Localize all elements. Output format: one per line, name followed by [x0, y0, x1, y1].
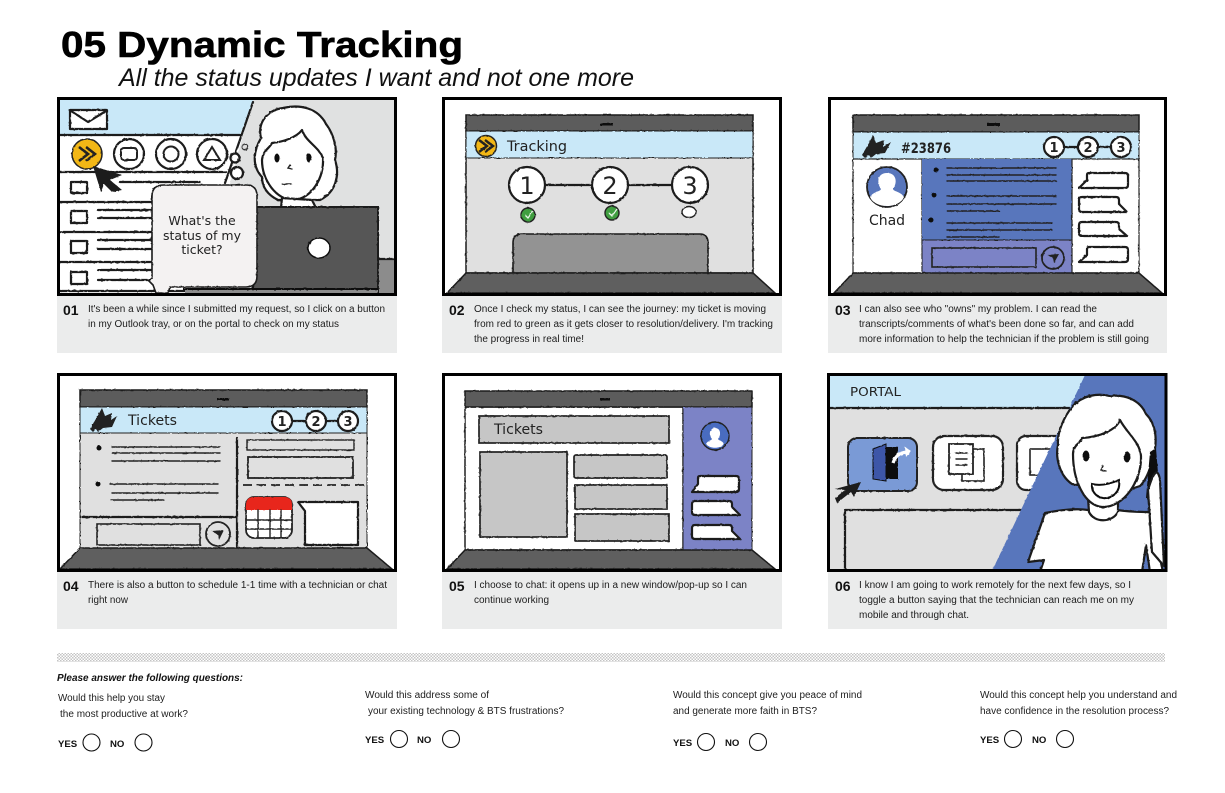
- laptop base: [447, 273, 775, 293]
- caption 01: It's been a while since I submitted my request, so I click on a button: [88, 304, 385, 315]
- chat bubbles: [1079, 173, 1128, 262]
- speech bubble: [149, 185, 257, 293]
- caption 06: I know I am going to work remotely for the next few days, so I: [859, 580, 1131, 591]
- caption background 03: [828, 296, 1167, 353]
- thought bubbles: [230, 144, 248, 179]
- list rows: [71, 182, 200, 284]
- panel 01: checking status from the Outlook tray: [57, 98, 400, 353]
- content area: [845, 510, 1030, 570]
- icon: logo mark: [862, 135, 891, 158]
- panel frame 06: [828, 374, 1166, 570]
- caption 05: I choose to chat: it opens up in a new window/pop-up so I can: [474, 580, 747, 591]
- chat bubbles: [692, 476, 740, 539]
- question 2: YES: [365, 735, 385, 746]
- question 3: NO: [725, 738, 740, 749]
- question 3: Would this concept give you peace of mind: [673, 690, 862, 701]
- panel 05: chat pop-up: [442, 374, 782, 629]
- panel frame 04: [58, 374, 396, 570]
- speech bubble text: ticket?: [181, 242, 223, 257]
- portal heading: PORTAL: [850, 384, 901, 399]
- transcript lines: [96, 446, 220, 500]
- icon: yellow tracking button: [72, 139, 102, 169]
- icon: calendar: [246, 497, 292, 538]
- icon: avatar Chad: [867, 167, 907, 207]
- caption 03: more information to help the technician if the problem is still going: [859, 334, 1149, 345]
- laptop base: [60, 548, 392, 569]
- caption 02: from red to green as it gets closer to resolution/delivery. I'm tracking: [474, 319, 773, 330]
- question 3: YES: [673, 738, 693, 749]
- question 4: [980, 690, 1177, 748]
- step number 02: 02: [449, 302, 465, 318]
- caption background 06: [828, 572, 1167, 629]
- step digits: 1: [1049, 141, 1059, 156]
- caption 02: Once I check my status, I can see the journey: my ticket is moving: [474, 304, 766, 315]
- blue diagonal background: [992, 375, 1168, 571]
- chat sidebar: [683, 407, 752, 550]
- step digits: 3: [1116, 141, 1126, 156]
- panel 04: schedule with a technician: [57, 374, 397, 629]
- caption 01: in my Outlook tray, or on the portal to check on my status: [88, 319, 339, 330]
- caption background 02: [442, 296, 782, 353]
- caption 05: continue working: [474, 595, 549, 606]
- icon: envelope: [70, 110, 107, 129]
- panel 03: ticket owner and transcript: [828, 98, 1167, 353]
- question 4: YES: [980, 735, 1000, 746]
- mini progress steps: [272, 411, 358, 431]
- mini progress steps: [1044, 137, 1131, 157]
- question 1: the most productive at work?: [60, 709, 189, 720]
- caption 03: I can also see who "owns" my problem. I can read the: [859, 304, 1097, 315]
- step number 05: 05: [449, 578, 465, 594]
- panel frame 01: [58, 98, 396, 294]
- questions heading: Please answer the following questions:: [57, 673, 243, 684]
- question 4: Would this concept help you understand and: [980, 690, 1177, 701]
- form boxes: [247, 440, 354, 478]
- caption 06: mobile and through chat.: [859, 610, 969, 621]
- caption 03: transcripts/comments of what's been done so far, and can add: [859, 319, 1134, 330]
- transcript lines: [928, 168, 1056, 237]
- question 3: and generate more faith in BTS?: [673, 706, 818, 717]
- technician name: Chad: [869, 213, 905, 229]
- ticket number: #23876: [901, 141, 951, 157]
- header text: Tickets: [493, 422, 543, 438]
- header text: Tracking: [506, 139, 567, 155]
- caption background 01: [57, 296, 397, 353]
- icon: mouse cursor: [93, 166, 122, 192]
- step digits: 3: [682, 172, 698, 200]
- icon: blue door tile: [848, 438, 917, 491]
- illustration 04: [58, 374, 396, 571]
- step digits: 2: [602, 172, 618, 200]
- icon: tray buttons: [114, 139, 227, 169]
- question 4: NO: [1032, 735, 1047, 746]
- speech bubble text: status of my: [163, 228, 242, 243]
- question 2: your existing technology & BTS frustrations?: [368, 706, 565, 717]
- step number 01: 01: [63, 302, 79, 318]
- question 2: [365, 690, 565, 748]
- panel frame 05: [444, 374, 780, 570]
- illustration 03: [829, 98, 1166, 295]
- caption 06: toggle a button saying that the technician can reach me on my: [859, 595, 1134, 606]
- question 2: Would this address some of: [365, 690, 489, 701]
- panel frame 03: [830, 98, 1166, 294]
- caption background 04: [57, 572, 397, 629]
- icon: yellow tracking logo: [476, 136, 496, 156]
- illustration 06: [829, 375, 1168, 572]
- step digits: 3: [343, 415, 353, 430]
- icon: cursor: [835, 482, 861, 503]
- step number 03: 03: [835, 302, 851, 318]
- panel 06: portal and remote work toggle: [828, 374, 1168, 629]
- dividers: [82, 438, 237, 547]
- step digits: 1: [277, 415, 287, 430]
- header text: Tickets: [127, 413, 177, 429]
- panel 02: tracking journey: [442, 98, 782, 353]
- question 1: YES: [58, 739, 78, 750]
- content boxes: [479, 416, 669, 541]
- question 1: NO: [110, 739, 125, 750]
- chat note: [298, 502, 358, 545]
- question 2: NO: [417, 735, 432, 746]
- illustration 01: [58, 98, 400, 296]
- illustration 02: [443, 98, 781, 295]
- laptop base: [834, 273, 1162, 293]
- illustration 05: [443, 374, 781, 571]
- laptop: [183, 207, 396, 296]
- progress steps: [509, 167, 708, 203]
- laptop base: [447, 550, 775, 569]
- step number 06: 06: [835, 578, 851, 594]
- question 3: [673, 690, 862, 750]
- title: 05 Dynamic Tracking: [61, 24, 463, 65]
- subtitle: All the status updates I want and not one more: [117, 64, 634, 92]
- icon: logo mark: [90, 408, 117, 432]
- reply input and send button: [932, 247, 1064, 269]
- question 1: Would this help you stay: [58, 693, 165, 704]
- step digits: 1: [519, 172, 535, 200]
- question 4: have confidence in the resolution process?: [980, 706, 1170, 717]
- step digits: 2: [311, 415, 321, 430]
- status dots: [521, 206, 696, 222]
- icon: avatar: [701, 422, 729, 450]
- step digits: 2: [1083, 141, 1093, 156]
- panel frame 02: [444, 98, 780, 294]
- caption 02: the progress in real time!: [474, 334, 584, 345]
- question 1: [58, 693, 189, 751]
- caption 04: right now: [88, 595, 129, 606]
- caption 04: There is also a button to schedule 1-1 time with a technician or chat: [88, 580, 387, 591]
- content card: [513, 234, 708, 273]
- caption background 05: [442, 572, 782, 629]
- speech bubble text: What's the: [168, 213, 236, 228]
- icon: documents tile: [933, 436, 1003, 490]
- step number 04: 04: [63, 578, 79, 594]
- reply input and send button: [97, 522, 230, 546]
- woman on phone: [1028, 395, 1164, 572]
- icon: third tile: [1015, 434, 1057, 492]
- woman thinking: [255, 107, 337, 208]
